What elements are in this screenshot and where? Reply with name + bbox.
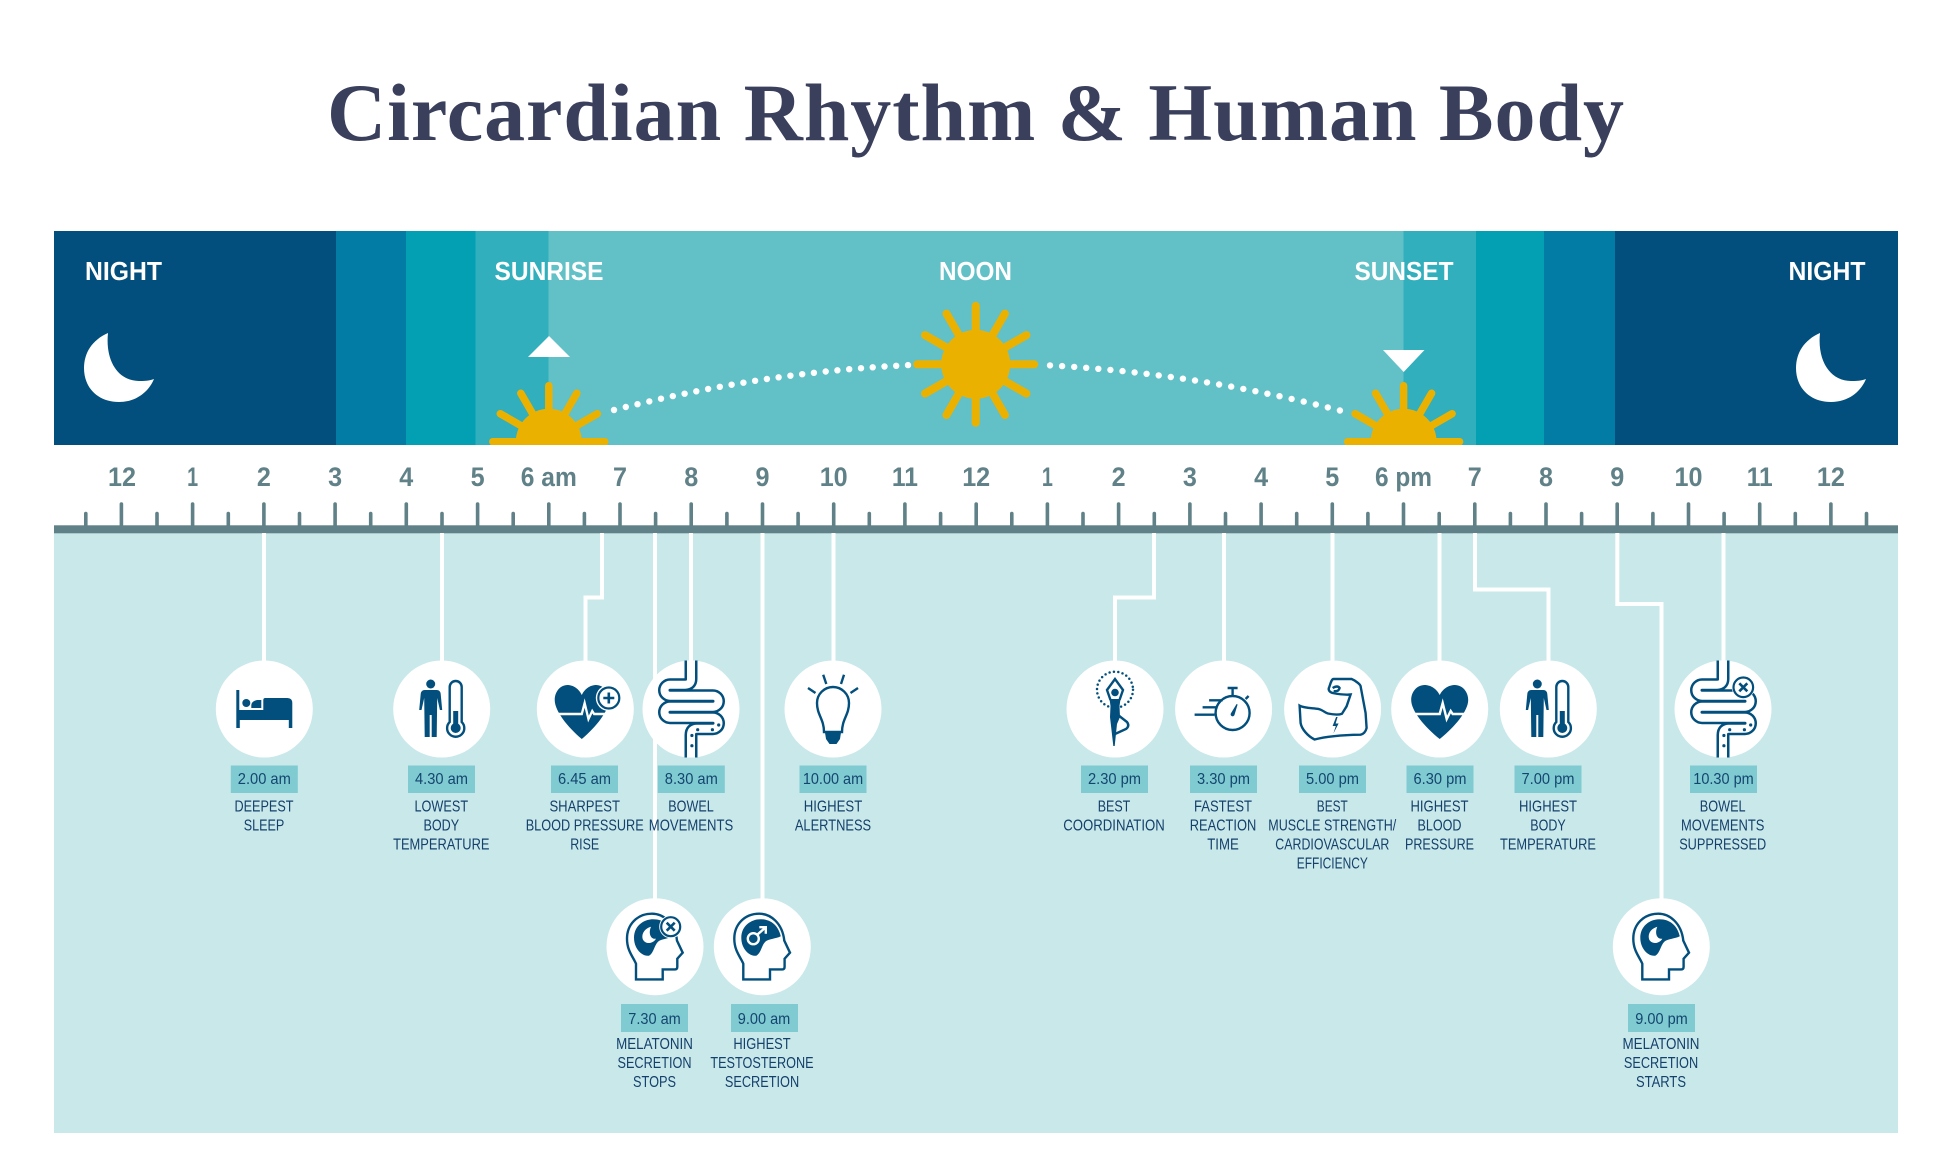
time axis with ticks	[54, 504, 1898, 533]
hour labels: 5	[1325, 462, 1339, 492]
hour labels: 9	[1610, 462, 1624, 492]
panel: events background	[54, 533, 1898, 1133]
event: melatonin secretion stops 7.30 am: MELATONIN	[616, 1036, 693, 1053]
event: highest blood pressure 6.30 pm	[1391, 660, 1488, 854]
event: highest alertness 10.00 am: ALERTNESS	[795, 818, 871, 835]
hour labels: 6 am	[521, 462, 577, 492]
icon: head with moon and cross	[627, 914, 683, 979]
event: lowest body temperature 4.30 am: 4.30 am	[415, 771, 468, 788]
label: sunset: SUNSET	[1354, 256, 1454, 286]
event: best coordination 2.30 pm: BEST	[1098, 799, 1131, 816]
event: lowest body temperature 4.30 am: LOWEST	[414, 799, 469, 816]
event: highest alertness 10.00 am: HIGHEST	[804, 799, 863, 816]
event: highest testosterone secretion 9.00 am: 9.00 am	[738, 1011, 790, 1028]
event: melatonin secretion starts 9.00 pm	[1613, 898, 1710, 1091]
icon: intestine	[664, 660, 720, 758]
hour labels: 10	[820, 462, 848, 492]
event: melatonin secretion stops 7.30 am: STOPS	[633, 1074, 676, 1091]
icon: bed	[236, 690, 292, 728]
event: highest blood pressure 6.30 pm: HIGHEST	[1410, 799, 1469, 816]
event: best coordination 2.30 pm	[1063, 660, 1165, 835]
event: bowel movements suppressed 10.30 pm: SUPPRESSED	[1679, 837, 1766, 854]
hour labels: 1	[187, 462, 198, 492]
event: melatonin secretion starts 9.00 pm: SECRETION	[1624, 1055, 1698, 1072]
hour labels: 6 pm	[1375, 462, 1432, 492]
event: best coordination 2.30 pm: 2.30 pm	[1088, 771, 1141, 788]
icon: heart with plus	[553, 685, 622, 739]
event: lowest body temperature 4.30 am: BODY	[423, 818, 459, 835]
icon: intestine with cross	[1696, 660, 1755, 758]
icon: moon right	[1796, 333, 1866, 402]
event: melatonin secretion stops 7.30 am: 7.30 am	[628, 1011, 681, 1028]
event: highest testosterone secretion 9.00 am: HIGHEST	[733, 1036, 791, 1053]
hour labels: 8	[1539, 462, 1553, 492]
event: fastest reaction time 3.30 pm: 3.30 pm	[1197, 771, 1250, 788]
event: fastest reaction time 3.30 pm: FASTEST	[1194, 799, 1252, 816]
arrow: sunset triangle	[1383, 350, 1424, 372]
event: melatonin secretion starts 9.00 pm: MELATONIN	[1622, 1036, 1700, 1053]
event: deepest sleep 2.00 am: SLEEP	[244, 818, 284, 835]
hour labels: 11	[1747, 462, 1773, 492]
panel: day and night band	[54, 231, 1898, 445]
event: best muscle strength 5.00 pm: BEST	[1317, 799, 1348, 816]
hour labels: 9	[756, 462, 770, 492]
event: best muscle strength 5.00 pm: 5.00 pm	[1306, 771, 1359, 788]
icon: head with male symbol	[734, 914, 790, 979]
event: deepest sleep 2.00 am: DEEPEST	[234, 799, 294, 816]
event: highest alertness 10.00 am: 10.00 am	[803, 771, 863, 788]
event: highest body temperature 7.00 pm: 7.00 pm	[1522, 771, 1574, 788]
event: fastest reaction time 3.30 pm: TIME	[1207, 837, 1239, 854]
event: highest testosterone secretion 9.00 am: TESTOSTERONE	[710, 1055, 814, 1072]
icon: person and thermometer	[419, 680, 464, 737]
event: sharpest blood pressure rise 6.45 am: 6.45 am	[558, 771, 611, 788]
event: deepest sleep 2.00 am: 2.00 am	[238, 771, 291, 788]
event: highest blood pressure 6.30 pm: BLOOD	[1418, 818, 1462, 835]
icon: head with moon	[1633, 914, 1689, 979]
sun path: afternoon dotted arc	[1050, 365, 1340, 410]
event: highest body temperature 7.00 pm: TEMPERATURE	[1500, 837, 1596, 854]
label: noon: NOON	[939, 256, 1012, 286]
event: melatonin secretion stops 7.30 am	[606, 898, 704, 1091]
event: bowel movements suppressed 10.30 pm: BOWEL	[1700, 799, 1746, 816]
hour labels: 11	[892, 462, 918, 492]
event: melatonin secretion starts 9.00 pm: 9.00 pm	[1635, 1011, 1688, 1028]
hour labels: 4	[1254, 462, 1268, 492]
event: melatonin secretion stops 7.30 am: SECRETION	[618, 1055, 692, 1072]
event: bowel movements 8.30 am	[642, 660, 740, 835]
icon: person and thermometer	[1526, 680, 1571, 737]
icon: sunset sun	[1344, 382, 1464, 445]
event: best muscle strength 5.00 pm	[1268, 660, 1397, 873]
connector lines	[264, 533, 1724, 905]
icon: sunrise sun	[489, 382, 608, 445]
event: bowel movements 8.30 am: 8.30 am	[665, 771, 718, 788]
icon: light bulb	[808, 675, 858, 744]
hour labels: 7	[1468, 462, 1482, 492]
event: best muscle strength 5.00 pm: CARDIOVASCULAR	[1275, 837, 1389, 854]
icon: noon sun	[917, 306, 1034, 423]
event: sharpest blood pressure rise 6.45 am: SHARPEST	[549, 799, 620, 816]
event: bowel movements suppressed 10.30 pm	[1674, 660, 1772, 854]
event: highest blood pressure 6.30 pm: PRESSURE	[1405, 837, 1474, 854]
event: best muscle strength 5.00 pm: MUSCLE STRENGTH/	[1268, 818, 1397, 835]
event: best coordination 2.30 pm: COORDINATION	[1063, 818, 1165, 835]
hour labels: 2	[1112, 462, 1126, 492]
event: sharpest blood pressure rise 6.45 am: RISE	[570, 837, 599, 854]
hour labels: 7	[613, 462, 627, 492]
label: night left: NIGHT	[85, 256, 162, 286]
event: deepest sleep 2.00 am	[216, 660, 313, 835]
event: bowel movements 8.30 am: MOVEMENTS	[649, 818, 733, 835]
event: highest body temperature 7.00 pm	[1500, 660, 1597, 854]
event: highest testosterone secretion 9.00 am: SECRETION	[725, 1074, 799, 1091]
hour labels: 2	[257, 462, 271, 492]
event: highest alertness 10.00 am	[784, 660, 882, 835]
hour labels: 10	[1674, 462, 1702, 492]
label: night right: NIGHT	[1788, 256, 1866, 286]
title: Circardian Rhythm & Human Body	[327, 67, 1624, 158]
event: best muscle strength 5.00 pm: EFFICIENCY	[1297, 856, 1368, 873]
icon: yoga figure	[1097, 672, 1133, 746]
sun path: morning dotted arc	[614, 365, 908, 410]
event: highest blood pressure 6.30 pm: 6.30 pm	[1414, 771, 1466, 788]
icon: stopwatch	[1195, 688, 1250, 730]
event: melatonin secretion starts 9.00 pm: STARTS	[1636, 1074, 1686, 1091]
hour labels: 1	[1042, 462, 1053, 492]
event: lowest body temperature 4.30 am: TEMPERATURE	[393, 837, 489, 854]
event: fastest reaction time 3.30 pm	[1175, 660, 1272, 854]
event: highest testosterone secretion 9.00 am	[710, 898, 814, 1091]
hour labels	[108, 462, 1845, 492]
hour labels: 5	[471, 462, 485, 492]
event: bowel movements suppressed 10.30 pm: 10.30 pm	[1693, 771, 1754, 788]
event: lowest body temperature 4.30 am	[393, 660, 490, 854]
label: sunrise: SUNRISE	[494, 256, 604, 286]
hour labels: 3	[1183, 462, 1197, 492]
hour labels: 8	[684, 462, 698, 492]
hour labels: 12	[1817, 462, 1845, 492]
event: highest body temperature 7.00 pm: HIGHEST	[1519, 799, 1577, 816]
event: sharpest blood pressure rise 6.45 am	[526, 660, 644, 854]
event: sharpest blood pressure rise 6.45 am: BLOOD PRESSURE	[526, 818, 644, 835]
hour labels: 3	[328, 462, 342, 492]
icon: heart with pulse	[1410, 685, 1470, 739]
hour labels: 12	[108, 462, 136, 492]
icon: moon left	[84, 333, 154, 402]
event: bowel movements 8.30 am: BOWEL	[668, 799, 714, 816]
hour labels: 4	[399, 462, 413, 492]
icon: flexed arm	[1300, 679, 1367, 740]
event: highest body temperature 7.00 pm: BODY	[1530, 818, 1566, 835]
arrow: sunrise triangle	[528, 336, 570, 357]
event: bowel movements suppressed 10.30 pm: MOVEMENTS	[1681, 818, 1764, 835]
event: fastest reaction time 3.30 pm: REACTION	[1190, 818, 1256, 835]
hour labels: 12	[962, 462, 990, 492]
